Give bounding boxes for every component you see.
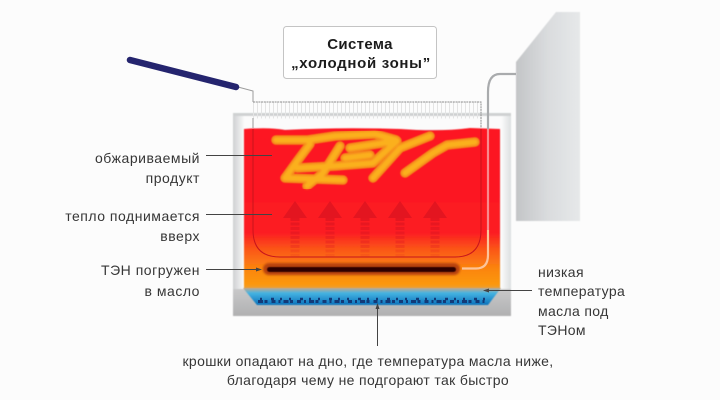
fried product — [276, 134, 475, 186]
basket handle — [130, 60, 253, 102]
label: crumbs: крошки опадают на дно, где температура масла ниже, — [182, 353, 554, 369]
heat arrows — [283, 201, 447, 258]
label: crumbs: благодаря чему не подгорают так быстро — [227, 372, 509, 388]
title box: „холодной зоны” — [291, 55, 431, 72]
frying oil — [244, 128, 500, 289]
heating element tube — [462, 74, 516, 268]
label: heat rises: тепло поднимается — [65, 208, 200, 224]
label: heating element: ТЭН погружен — [101, 262, 200, 278]
label: low oil temperature — [483, 264, 625, 338]
label: heating element: в масло — [144, 283, 200, 299]
label: low oil temperature: масла под — [538, 303, 609, 319]
label: fried product: обжариваемый — [95, 150, 200, 166]
label: fried product: продукт — [146, 170, 200, 186]
frying basket — [253, 102, 481, 257]
title box — [284, 26, 436, 78]
title box: Система — [327, 36, 393, 53]
heating element head unit — [516, 12, 580, 221]
label: fried product — [95, 150, 272, 186]
label: heat rises: вверх — [160, 228, 200, 244]
label: heating element — [101, 262, 262, 299]
label: crumbs — [182, 303, 554, 388]
crumbs on the bottom — [258, 299, 486, 302]
fryer tank — [233, 113, 511, 316]
label: low oil temperature: низкая — [538, 264, 584, 280]
cold zone — [243, 288, 501, 305]
label: low oil temperature: температура — [538, 283, 625, 299]
heating element — [263, 263, 460, 275]
label: low oil temperature: ТЭНом — [538, 322, 586, 338]
label: heat rises — [65, 208, 272, 244]
